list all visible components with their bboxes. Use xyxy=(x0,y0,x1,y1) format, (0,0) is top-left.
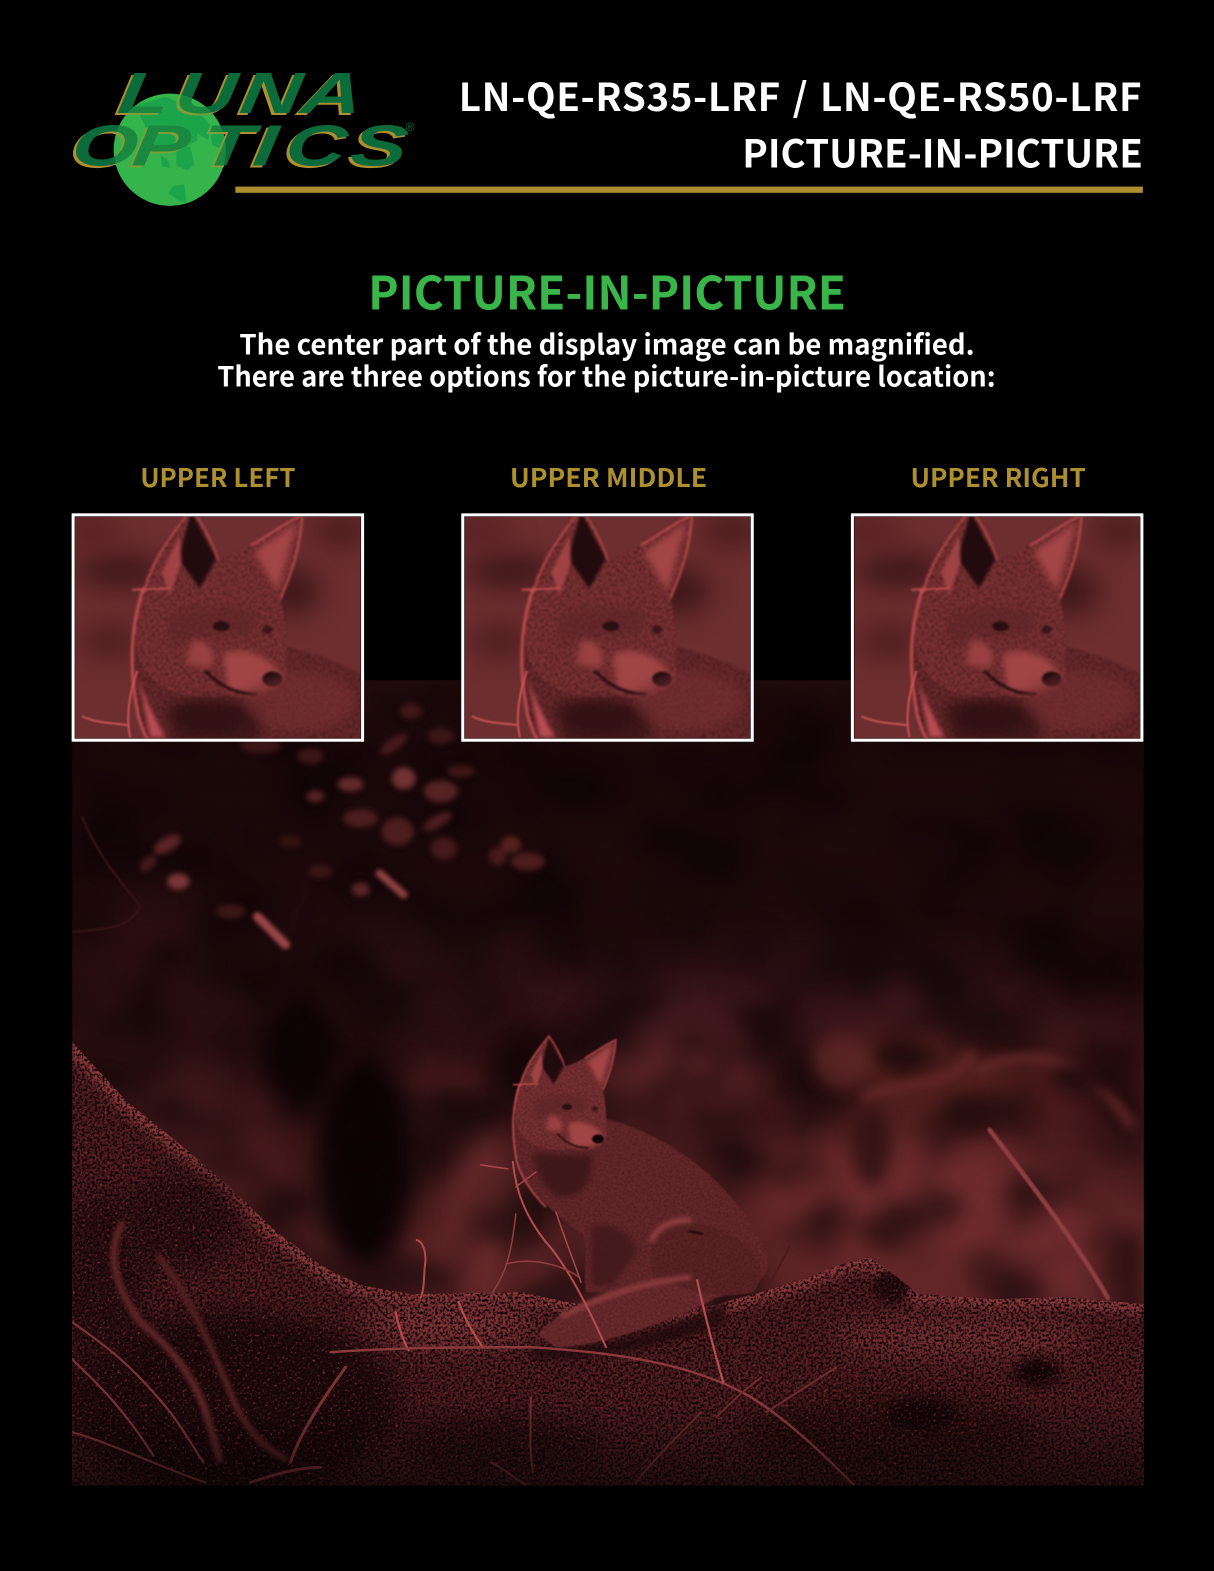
inset: upper middle magnified fox xyxy=(450,507,942,1041)
twigs and branches xyxy=(72,1130,1108,1484)
bottom shading xyxy=(72,1412,1144,1486)
background branches xyxy=(813,1036,1132,1187)
label: upper left: UPPER LEFT xyxy=(140,458,296,495)
intro text: The center part of the display image can be magnified. xyxy=(239,323,975,363)
logo wordmark: LUNA xyxy=(111,63,364,128)
header title: LN-QE-RS35-LRF / LN-QE-RS50-LRF xyxy=(459,67,1142,123)
label: upper middle: UPPER MIDDLE xyxy=(510,458,707,495)
logo: Luna Optics xyxy=(73,73,414,206)
logo wordmark: OPTICS xyxy=(68,113,412,178)
logo wordmark: LUNA xyxy=(114,61,367,126)
header title: PICTURE-IN-PICTURE xyxy=(742,123,1143,179)
panel: night-vision scene xyxy=(55,680,1162,1492)
intro text xyxy=(217,323,996,395)
logo wordmark: OPTICS xyxy=(65,115,409,180)
background mottling xyxy=(72,680,1144,1331)
heading: PICTURE-IN-PICTURE xyxy=(368,258,846,324)
logo wordmark xyxy=(65,61,412,180)
intro text: There are three options for the picture-in-picture location: xyxy=(217,355,996,395)
tree trunk and mossy ground xyxy=(55,1042,1145,1492)
logo globe xyxy=(114,94,226,206)
foliage highlights xyxy=(72,703,545,945)
registered mark: ® xyxy=(406,120,415,134)
header title xyxy=(459,67,1143,179)
blurred forest background xyxy=(80,901,1162,1302)
label: upper right: UPPER RIGHT xyxy=(910,458,1086,495)
fox xyxy=(513,1035,768,1358)
header rule xyxy=(235,187,1143,193)
logo globe overlay xyxy=(114,94,226,206)
inset: upper left magnified fox xyxy=(60,507,553,1041)
inset: upper right magnified fox xyxy=(839,507,1214,1041)
